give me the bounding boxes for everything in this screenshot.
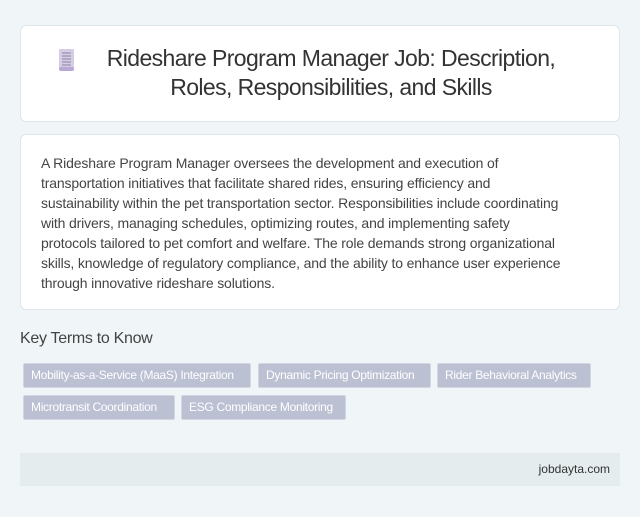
tag: Dynamic Pricing Optimization [266,368,414,382]
text block: description: A Rideshare Program Manager oversees the development and execution of [41,155,498,171]
title: Rideshare Program Manager Job: Description, Roles, Responsibilities, and Skills [107,45,555,100]
tag [437,363,591,388]
tag: Rider Behavioral Analytics [445,368,577,382]
tag: ESG Compliance Monitoring [189,400,333,414]
tag [181,395,346,420]
text block: description: transportation initiatives that facilitate shared rides, ensuring efficiency and [41,175,490,191]
text block: description: with drivers, managing schedules, optimizing routes, and implementing safety [41,215,510,231]
text block: description: sustainability within the pet transportation sector. Responsibilities include coordinating [41,195,558,211]
panel: header [20,25,620,122]
panel: description [20,134,620,310]
text block: description: skills, knowledge of regulatory compliance, and the ability to enhance user experience [41,255,560,271]
icon: document [59,49,74,71]
footer text: jobdayta.com [539,462,610,476]
tag: Microtransit Coordination [31,400,157,414]
text block: description: protocols tailored to pet comfort and welfare. The role demands strong organizational [41,235,555,251]
tag: Mobility-as-a-Service (MaaS) Integration [31,368,234,382]
heading: key terms: Key Terms to Know [20,330,152,347]
tag [23,363,251,388]
tag [23,395,175,420]
tag [258,363,431,388]
text block: description [41,155,560,291]
footer [20,453,620,486]
text block: description: through innovative rideshare solutions. [41,275,275,291]
